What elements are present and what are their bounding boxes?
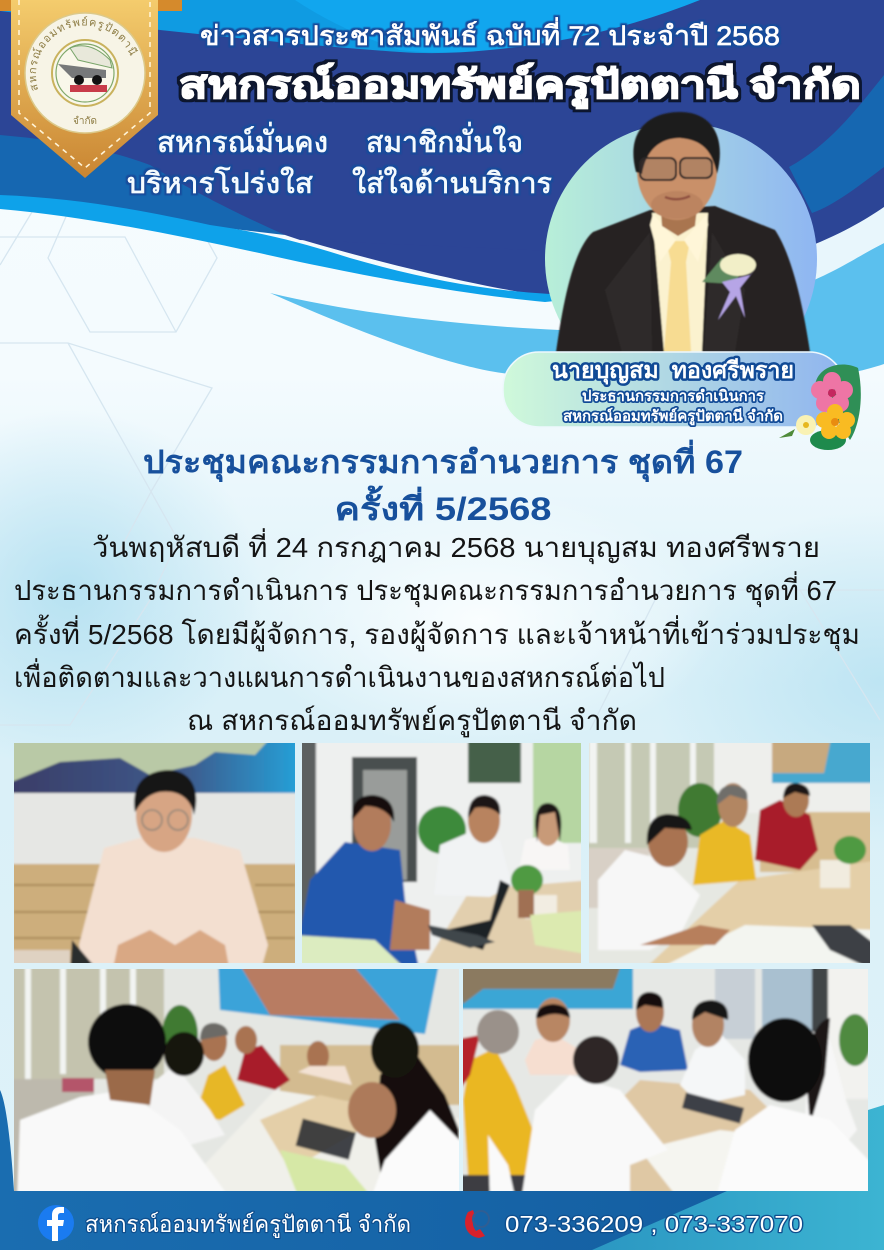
phone numbers: 073-336209 , 073-337070 [505,1211,803,1237]
body text: ประธานกรรมการดำเนินการ ประชุมคณะกรรมการอำนวยการ ชุดที่ 67 [14,571,837,608]
mid-blue wave left [0,135,285,235]
chairman position: ประธานกรรมการดำเนินการ [582,387,765,405]
body text: ณ สหกรณ์ออมทรัพย์ครูปัตตานี จำกัด [187,705,637,738]
photo 4: meeting from behind [14,969,459,1191]
white band right [800,207,884,286]
icon: phone [465,1210,489,1238]
light-blue swoosh [270,243,884,378]
cooperative seal: จำกัด [73,116,97,127]
slogan: บริหารโปร่งใส [127,166,313,200]
icon: tropical flowers [779,365,861,450]
cooperative seal [24,12,146,134]
portrait: chairman [556,112,810,352]
boutonniere [702,254,756,320]
name plate [503,352,845,427]
header wave layers [0,0,884,378]
body text: วันพฤหัสบดี ที่ 24 กรกฎาคม 2568 นายบุญสม ทองศรีพราย [92,528,820,565]
photo 5: meeting from opposite side [463,969,868,1191]
body text [14,528,860,738]
cyan wave [0,195,565,302]
facebook page name: สหกรณ์ออมทรัพย์ครูปัตตานี จำกัด [85,1211,411,1238]
portrait circle [545,123,817,395]
chairman organisation: สหกรณ์ออมทรัพย์ครูปัตตานี จำกัด [563,407,783,426]
footer background [0,1090,884,1250]
slogan [127,122,552,200]
meeting heading [143,439,743,527]
newsletter issue line: ข่าวสารประชาสัมพันธ์ ฉบับที่ 72 ประจำปี 2568 [200,17,780,51]
slogan: ใส่ใจด้านบริการ [352,166,552,200]
cooperative seal: สหกรณ์ออมทรัพย์ครูปัตตานี [30,16,138,91]
cooperative name title: สหกรณ์ออมทรัพย์ครูปัตตานี จำกัด [179,62,861,109]
photo 1: chairman at table [14,743,295,963]
mid-blue wave right [789,75,884,213]
photo 3: committee at table [589,743,870,963]
photo 2: staff at laptop [302,743,581,963]
meeting heading: ครั้งที่ 5/2568 [334,485,552,527]
body text: เพื่อติดตามและวางแผนการดำเนินงานของสหกรณ์ต่อไป [14,658,665,693]
slogan: สหกรณ์มั่นคง [157,122,328,159]
slogan: สมาชิกมั่นใจ [366,122,523,159]
gold ribbon badge [0,0,182,178]
chairman name: นายบุญสม ทองศรีพราย [552,357,794,385]
icon: facebook [38,1205,74,1241]
meeting heading: ประชุมคณะกรรมการอำนวยการ ชุดที่ 67 [143,439,743,483]
body text: ครั้งที่ 5/2568 โดยมีผู้จัดการ, รองผู้จัดการ และเจ้าหน้าที่เข้าร่วมประชุม [14,614,860,652]
